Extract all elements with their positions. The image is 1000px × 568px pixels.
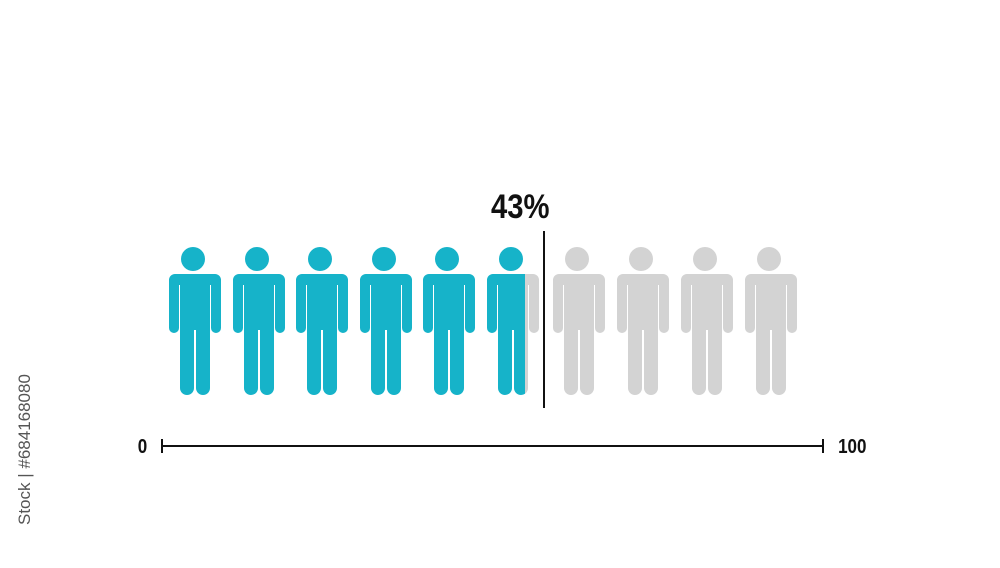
watermark text: Stock | #684168080 <box>15 374 34 525</box>
icon: person 8 <box>617 247 669 395</box>
icon: person 10 <box>745 247 797 395</box>
icon: person 5 <box>423 247 475 395</box>
icon: person 4 <box>360 247 412 395</box>
icon: person 7 <box>553 247 605 395</box>
axis label 0: 0 <box>138 435 147 457</box>
marker line <box>543 231 545 408</box>
icon: person 6 partial <box>487 247 539 395</box>
icon: person 3 <box>296 247 348 395</box>
icon: person 9 <box>681 247 733 395</box>
axis label 100: 100 <box>838 435 866 457</box>
icon: person 2 <box>233 247 285 395</box>
icon: person 1 <box>169 247 221 395</box>
figure row <box>169 247 797 395</box>
title: percentage: 43% <box>491 187 550 226</box>
axis <box>162 439 823 453</box>
